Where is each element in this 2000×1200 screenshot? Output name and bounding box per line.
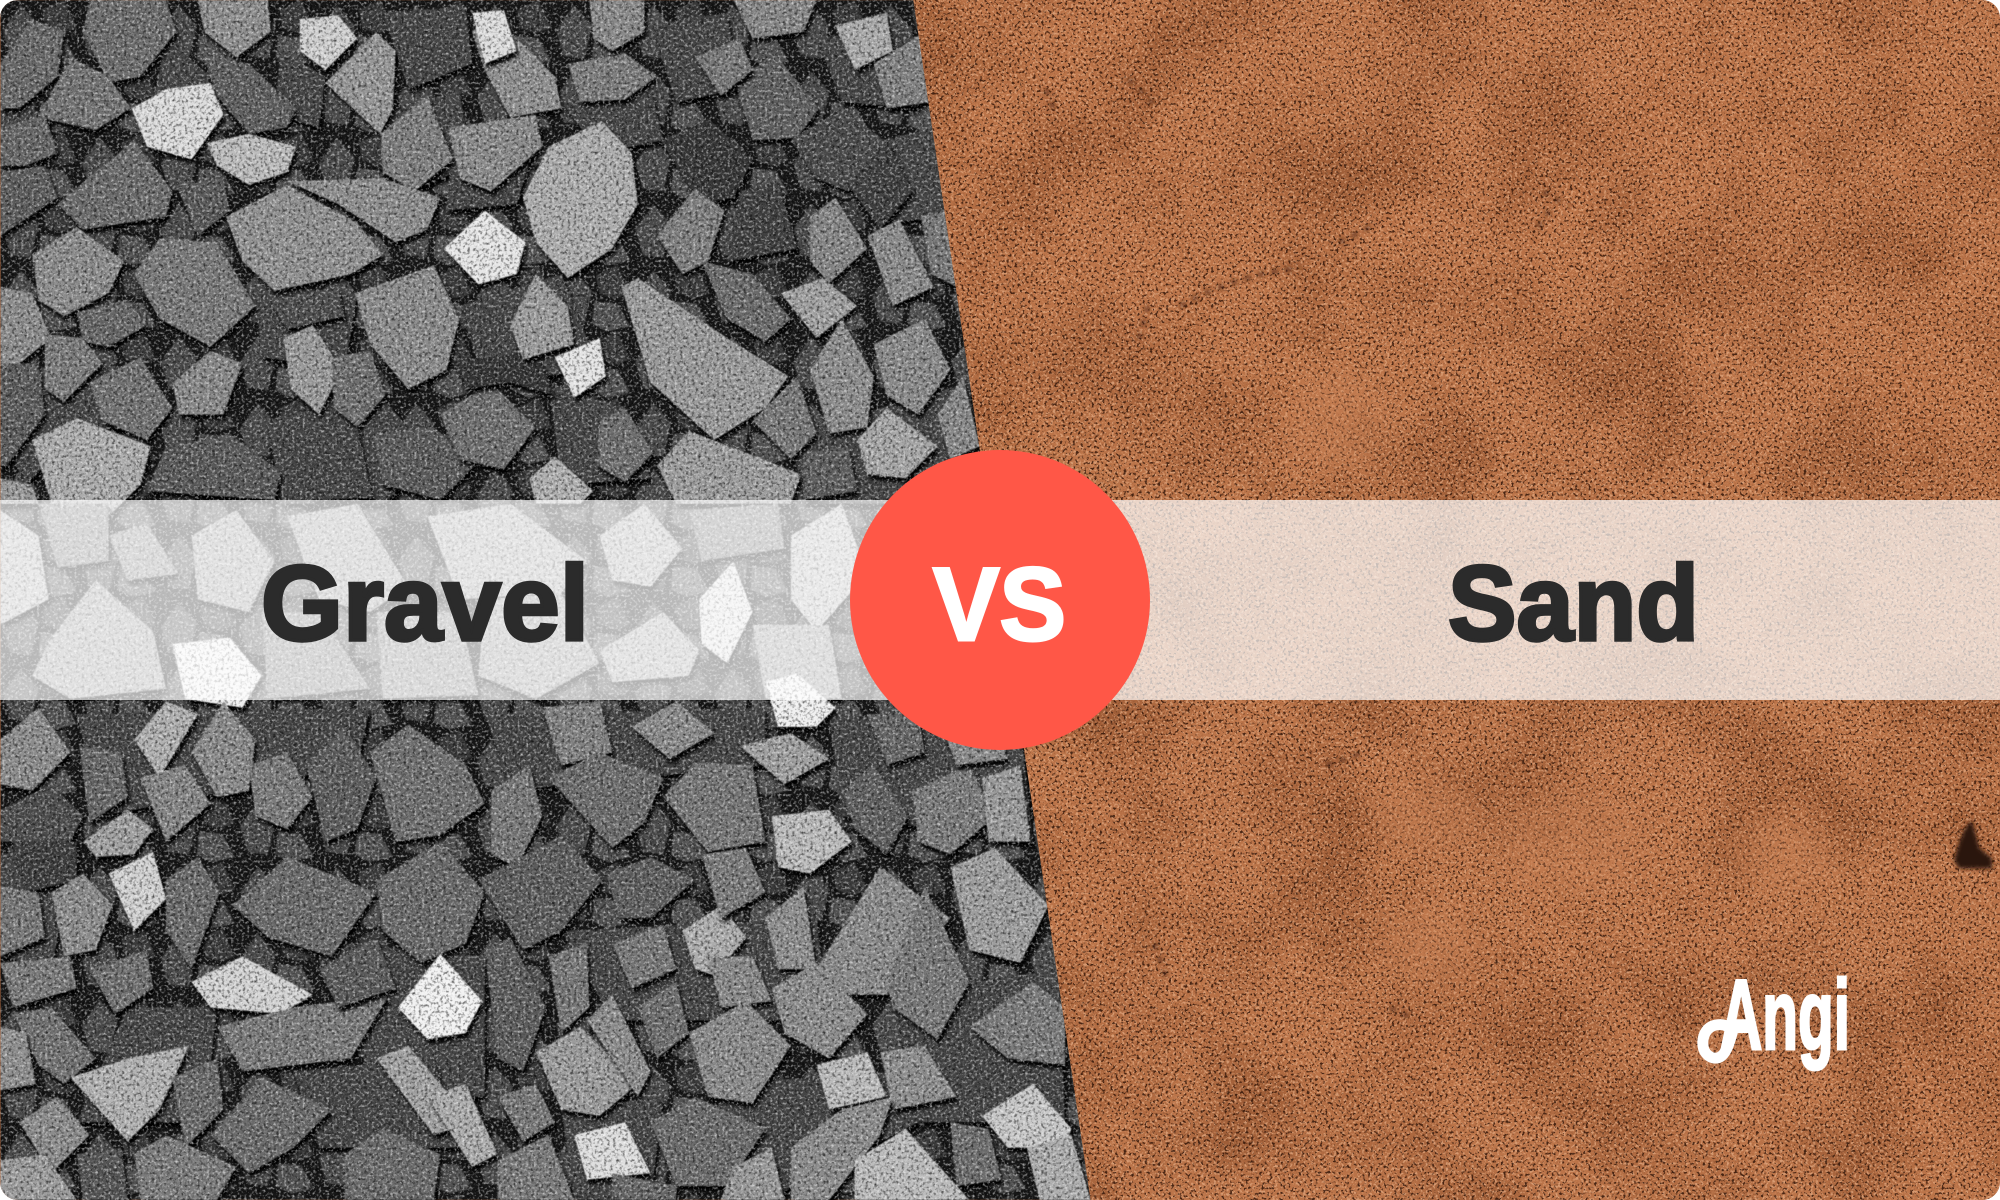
heading: Sand: Sand [1448,543,1699,663]
lower stones [765,673,835,727]
gravel stones [0,0,1097,1200]
top row stones [0,19,64,108]
VS badge: VS [933,547,1066,663]
sand texture [893,0,2000,1200]
banner strip [0,500,2000,700]
Angi logo: Angi [1720,959,1850,1070]
Angi logo [1703,959,1850,1070]
filler stones, back layer [0,6,1065,1200]
dark hole in sand [1954,820,1992,868]
VS badge [850,450,1150,750]
heading: Gravel: Gravel [261,543,589,663]
stones under band [0,510,49,625]
